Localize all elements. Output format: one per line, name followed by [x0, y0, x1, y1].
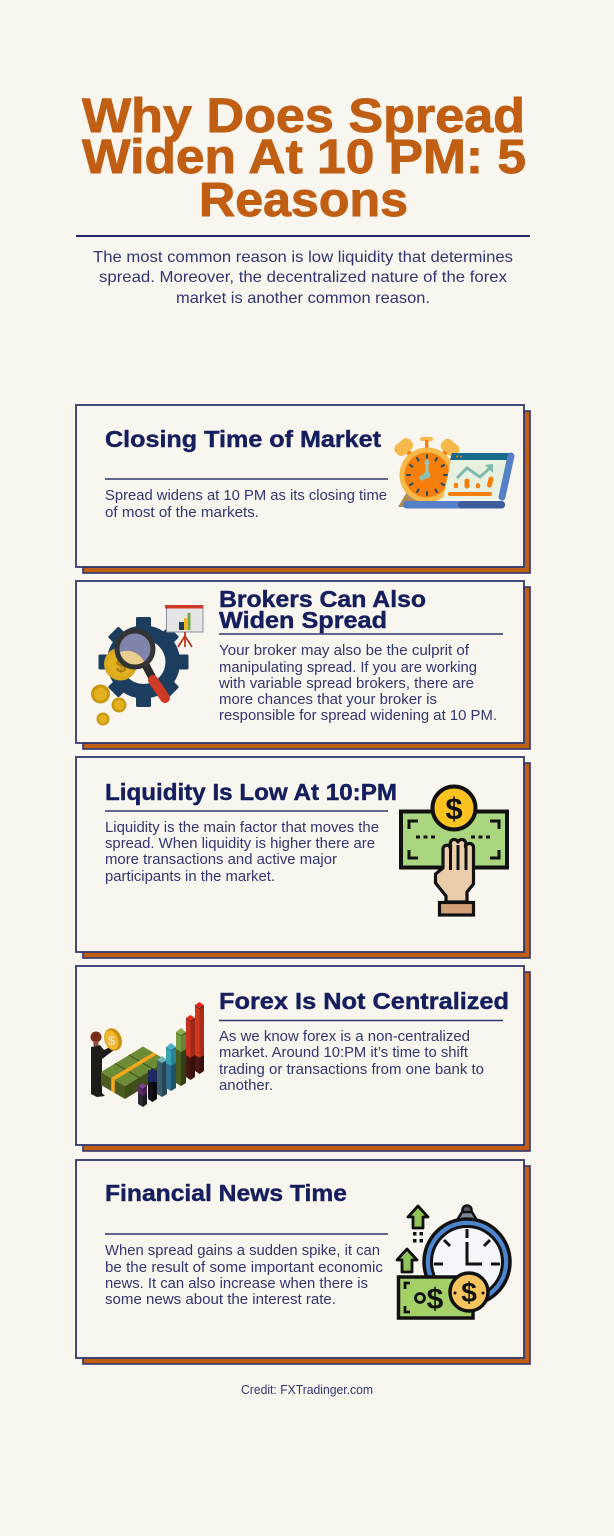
title: [82, 90, 526, 227]
text: financial news: be the result of some important economic: [105, 1260, 383, 1276]
text: forex: trading or transactions from one bank to: [219, 1062, 484, 1078]
text: brokers: [218, 643, 497, 724]
rising bars: [138, 1002, 204, 1107]
text: liquidity: [105, 820, 379, 885]
text: financial news: When spread gains a sudden spike, it can: [105, 1243, 380, 1259]
text: closing time: Spread widens at 10 PM as its closing time: [105, 488, 387, 504]
panel: liquidity is low: [76, 757, 530, 958]
heading: closing time: Closing Time of Market: [105, 426, 381, 452]
text: financial news: [105, 1243, 383, 1308]
text: liquidity: more transactions and active major: [105, 852, 337, 868]
icon: clock, banknote and up arrows: [397, 1206, 510, 1318]
icon: businessman, cash stacks and rising bars: [90, 1002, 204, 1107]
icon: stopwatch and laptop: [392, 436, 511, 508]
intro text: market is another common reason.: [176, 290, 430, 307]
text: liquidity: spread. When liquidity is higher there are: [105, 836, 375, 852]
text: brokers: responsible for spread widening at 10 PM.: [219, 708, 497, 724]
text: closing time: [105, 488, 387, 521]
heading: forex: Forex Is Not Centralized: [219, 988, 509, 1014]
businessman: $: [108, 1033, 116, 1048]
text: forex: [219, 1029, 484, 1094]
credit: Credit: FXTradinger.com: [241, 1383, 373, 1397]
icon: hand with banknote and dollar coin: [401, 786, 507, 915]
title: Widen At 10 PM: 5: [82, 131, 526, 184]
text: forex: market. Around 10:PM it’s time to shift: [219, 1045, 468, 1061]
heading: liquidity: Liquidity Is Low At 10:PM: [105, 779, 397, 805]
panel: financial news time: [76, 1160, 530, 1364]
title: Why Does Spread: [82, 90, 525, 143]
text: brokers: more chances that your broker is: [219, 692, 437, 708]
heading: brokers: [219, 586, 426, 633]
text: closing time: of most of the markets.: [105, 505, 259, 521]
text: forex: As we know forex is a non-centralized: [219, 1029, 470, 1045]
text: financial news: some news about the interest rate.: [105, 1292, 336, 1308]
icon: clock, banknote and up arrows: $: [461, 1277, 477, 1308]
heading: brokers: Brokers Can Also: [219, 586, 426, 612]
cash stacks: [101, 1046, 167, 1099]
panel: brokers can also widen spread: [76, 581, 530, 749]
icon: gear, magnifier and coins: $: [116, 656, 127, 677]
text: brokers: Your broker may also be the culprit of: [219, 643, 470, 659]
text: liquidity: participants in the market.: [105, 869, 275, 885]
text: forex: another.: [219, 1078, 273, 1094]
intro text: spread. Moreover, the decentralized nature of the forex: [99, 269, 507, 286]
text: financial news: news. It can also increase when there is: [105, 1276, 368, 1292]
panel: closing time of market: [76, 405, 530, 573]
icon: clock, banknote and up arrows: $: [427, 1283, 444, 1316]
text: brokers: with variable spread brokers, there are: [218, 676, 474, 692]
heading: brokers: Widen Spread: [219, 607, 387, 633]
icon: hand with banknote and dollar coin: $: [445, 791, 463, 826]
intro text: The most common reason is low liquidity that determines: [93, 249, 513, 266]
icon: gear, magnifier and coins: [91, 605, 203, 726]
heading: financial news: Financial News Time: [105, 1180, 347, 1206]
intro text: [93, 249, 513, 307]
text: brokers: manipulating spread. If you are working: [219, 660, 477, 676]
title: Reasons: [199, 174, 408, 227]
panel: forex is not centralized: [76, 966, 530, 1151]
text: liquidity: Liquidity is the main factor that moves the: [105, 820, 379, 836]
